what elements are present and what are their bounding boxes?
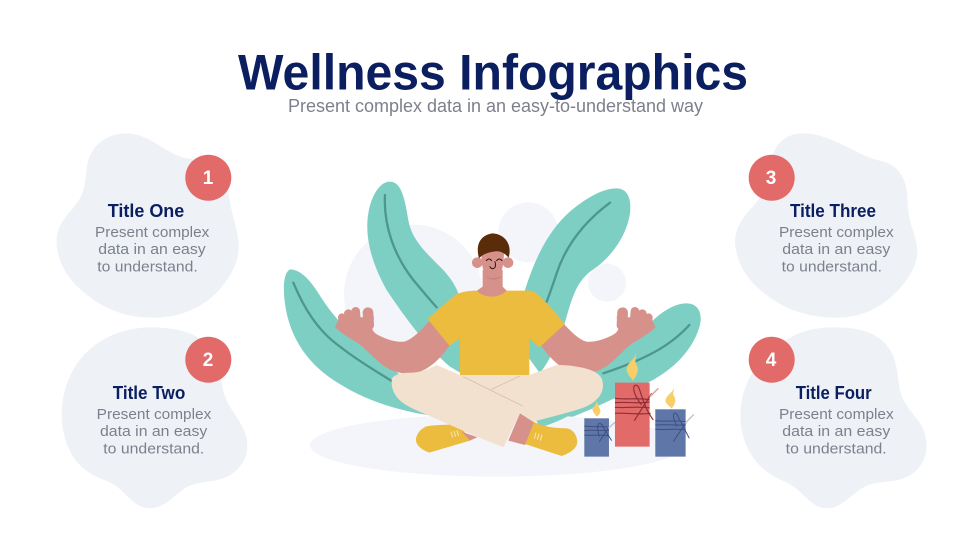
text two: data in an easy bbox=[100, 423, 208, 440]
number badge 1 bbox=[185, 155, 231, 201]
leaves bbox=[284, 182, 701, 427]
text two: to understand. bbox=[103, 440, 204, 458]
number badge 4: 4 bbox=[766, 350, 777, 371]
background circles bbox=[344, 202, 626, 363]
text one bbox=[95, 224, 210, 276]
heading three: Title Three bbox=[790, 201, 876, 221]
subtitle: Present complex data in an easy-to-understand way bbox=[288, 96, 703, 116]
text one: Present complex bbox=[95, 224, 210, 241]
blob four bbox=[740, 327, 927, 508]
ankles bbox=[462, 413, 534, 445]
face bbox=[486, 259, 502, 269]
neck shadow bbox=[485, 275, 501, 279]
left foot bbox=[416, 425, 470, 453]
neck bbox=[476, 270, 507, 302]
number badge 3: 3 bbox=[766, 168, 776, 189]
text three: Present complex bbox=[779, 224, 894, 241]
text three bbox=[779, 224, 894, 276]
left arm and hand bbox=[335, 311, 451, 374]
blob one bbox=[57, 133, 239, 318]
panel: title four bbox=[740, 327, 927, 508]
text three: data in an easy bbox=[782, 241, 891, 258]
number badge 1: 1 bbox=[203, 168, 214, 189]
ground shadow bbox=[310, 414, 683, 477]
panel: title two bbox=[62, 327, 247, 508]
candle: tall red bbox=[615, 352, 658, 447]
text three: to understand. bbox=[782, 258, 882, 276]
number badge 4 bbox=[749, 337, 795, 383]
text four: data in an easy bbox=[782, 423, 891, 440]
candle: small blue bbox=[584, 401, 615, 457]
text one: data in an easy bbox=[98, 241, 206, 258]
text two bbox=[97, 406, 212, 458]
blob three bbox=[735, 133, 917, 318]
shirt bbox=[428, 291, 565, 375]
hair bbox=[478, 233, 510, 258]
blob two bbox=[62, 327, 247, 508]
text one: to understand. bbox=[97, 258, 198, 276]
leaf veins bbox=[293, 195, 689, 381]
number badge 2: 2 bbox=[203, 350, 213, 371]
heading four: Title Four bbox=[796, 383, 872, 403]
number badge 3 bbox=[749, 155, 795, 201]
illustration: meditating person bbox=[284, 182, 701, 477]
candle: medium blue bbox=[655, 387, 694, 457]
legs and pants bbox=[392, 365, 603, 447]
heading two: Title Two bbox=[113, 383, 185, 403]
head bbox=[472, 250, 513, 278]
panel: title one bbox=[57, 133, 239, 318]
number badge 2 bbox=[185, 337, 231, 383]
text four: to understand. bbox=[786, 440, 887, 458]
right arm and hand bbox=[540, 311, 656, 374]
lower leaf overlap bbox=[527, 383, 613, 427]
title: Wellness Infographics bbox=[238, 44, 748, 100]
right foot bbox=[525, 422, 577, 456]
text two: Present complex bbox=[97, 406, 212, 423]
candles bbox=[584, 352, 694, 457]
heading one: Title One bbox=[108, 201, 184, 221]
text four: Present complex bbox=[779, 406, 894, 423]
panel: title three bbox=[735, 133, 917, 318]
pant fold lines bbox=[463, 376, 523, 406]
text four bbox=[779, 406, 894, 458]
